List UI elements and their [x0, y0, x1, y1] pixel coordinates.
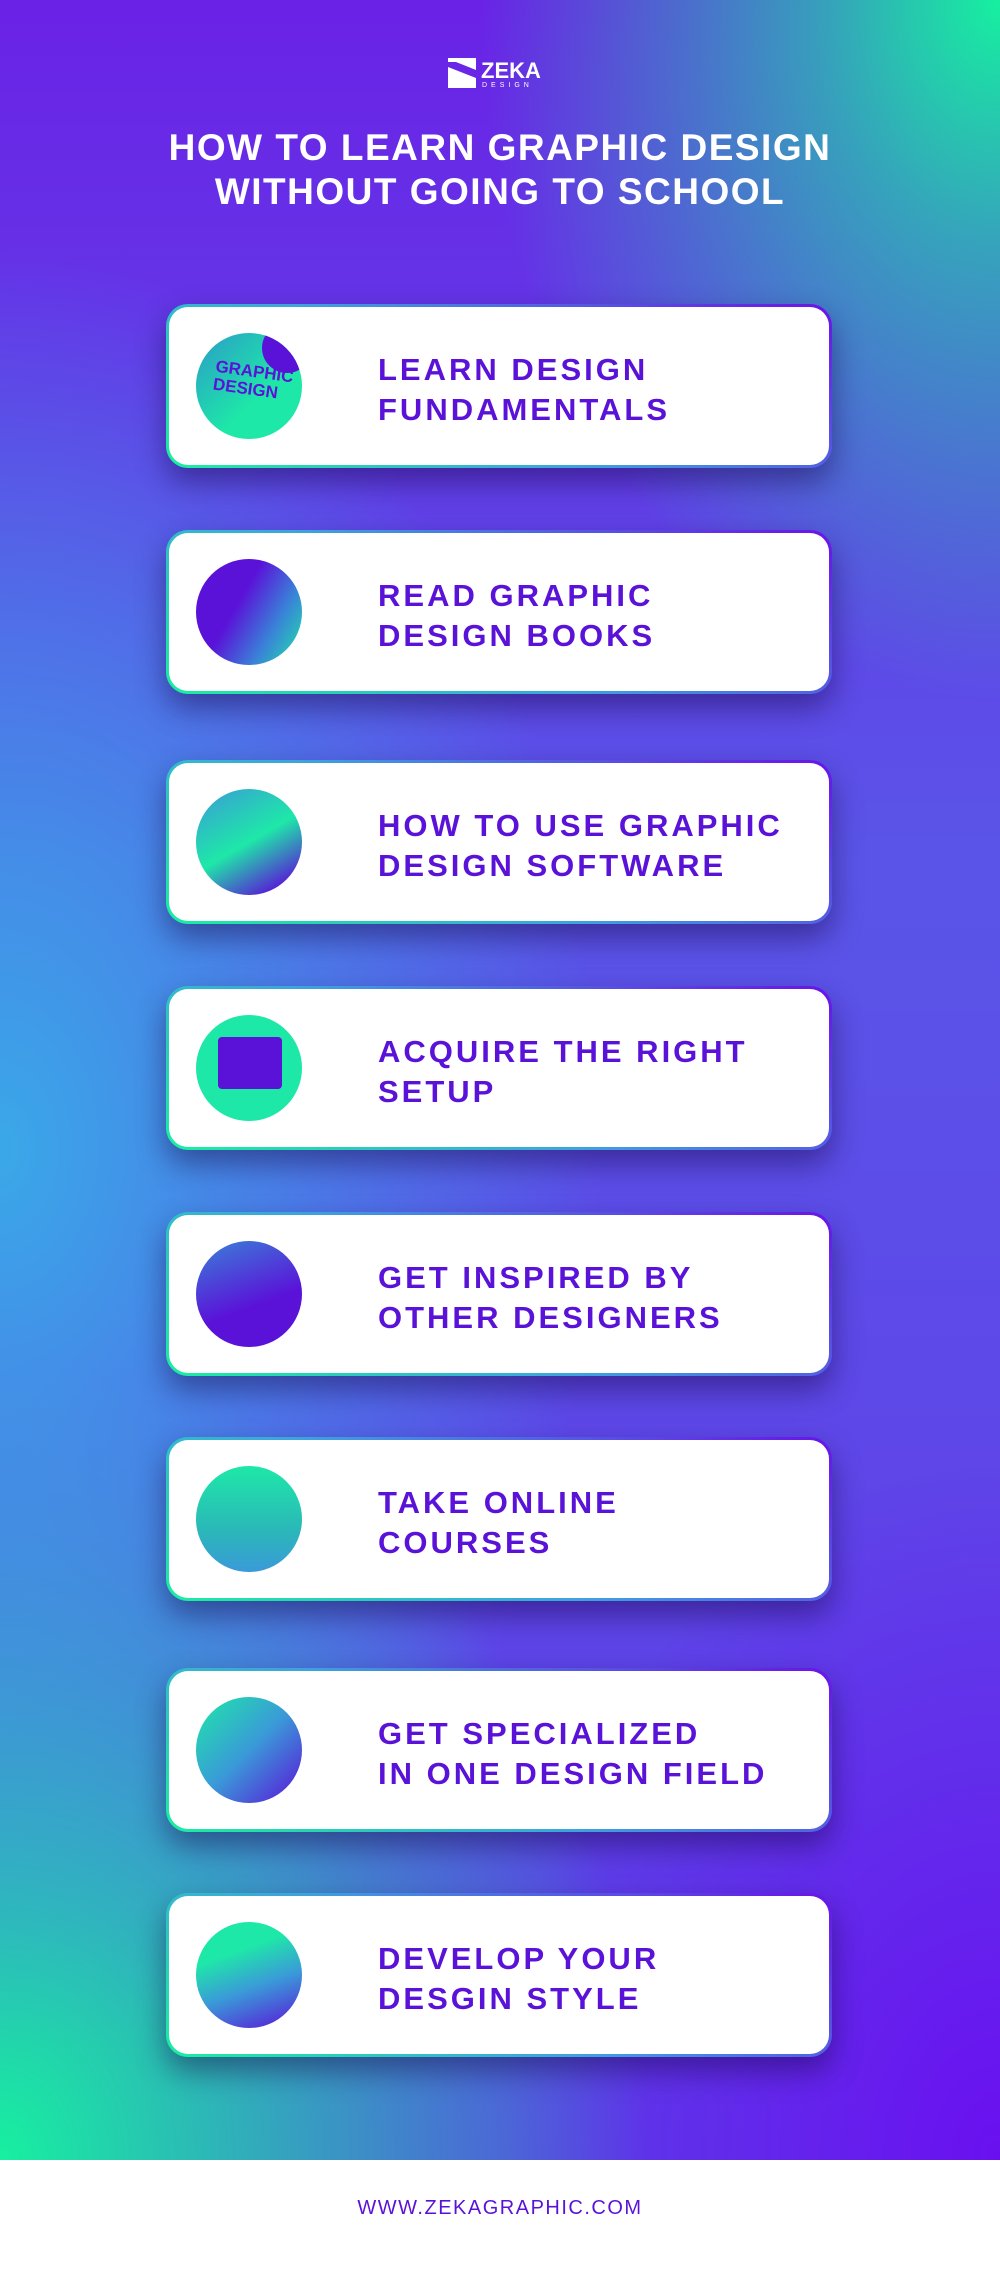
footer url: WWW.ZEKAGRAPHIC.COM: [357, 2197, 643, 2219]
text: [378, 1485, 619, 1560]
text: COURSES: [378, 1525, 552, 1560]
icon: monitor setup: [196, 1015, 302, 1121]
text: IN ONE DESIGN FIELD: [378, 1756, 767, 1791]
icon: graphic design book: GRAPHIC: [214, 357, 295, 386]
logo: [448, 58, 541, 88]
icon: person: [196, 1241, 302, 1347]
text: TAKE ONLINE: [378, 1485, 619, 1520]
icon: tablet: [196, 1697, 302, 1803]
icon: woman laptop: [196, 1466, 302, 1572]
text: [378, 1941, 659, 2016]
card 2: [166, 530, 832, 694]
text: [378, 1716, 767, 1791]
icon: graphic design book: DESIGN: [212, 375, 279, 402]
icon: drawing hand: [196, 1922, 302, 2028]
logo: ZEKA: [481, 58, 541, 83]
text: HOW TO USE GRAPHIC: [378, 808, 783, 843]
card 4: [166, 986, 832, 1150]
text: GET INSPIRED BY: [378, 1260, 693, 1295]
text: [378, 1260, 723, 1335]
title: [169, 127, 831, 212]
card 7: [166, 1668, 832, 1832]
card 6: [166, 1437, 832, 1601]
text: DEVELOP YOUR: [378, 1941, 659, 1976]
text: ACQUIRE THE RIGHT: [378, 1034, 748, 1069]
text: [378, 352, 670, 427]
icon: software: [196, 789, 302, 895]
text: READ GRAPHIC: [378, 578, 653, 613]
title: HOW TO LEARN GRAPHIC DESIGN: [169, 127, 831, 168]
title: WITHOUT GOING TO SCHOOL: [215, 171, 785, 212]
text: [378, 1034, 748, 1109]
card 8: [166, 1893, 832, 2057]
text: DESIGN BOOKS: [378, 618, 655, 653]
text: DESGIN STYLE: [378, 1981, 641, 2016]
text: GET SPECIALIZED: [378, 1716, 700, 1751]
icon: books: [196, 559, 302, 665]
card 3: [166, 760, 832, 924]
text: LEARN DESIGN: [378, 352, 648, 387]
card 1: [166, 304, 832, 468]
card 5: [166, 1212, 832, 1376]
text: FUNDAMENTALS: [378, 392, 670, 427]
text: OTHER DESIGNERS: [378, 1300, 723, 1335]
icon: graphic design book: [196, 333, 302, 439]
text: SETUP: [378, 1074, 496, 1109]
text: [378, 808, 783, 883]
text: [378, 578, 655, 653]
text: DESIGN SOFTWARE: [378, 848, 726, 883]
